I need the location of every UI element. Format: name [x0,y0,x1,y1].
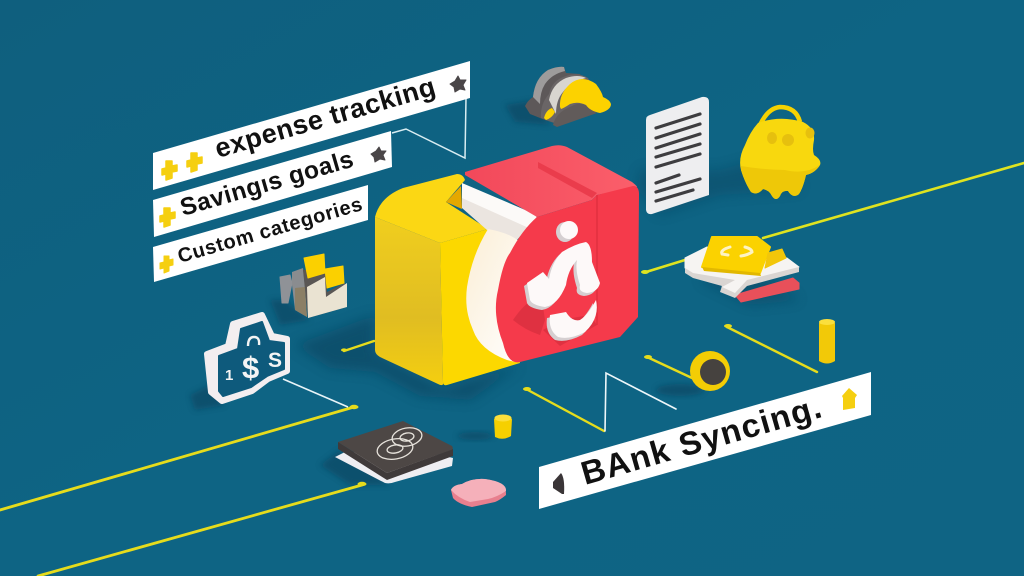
label: savings goals [153,131,392,237]
person symbol [524,221,600,341]
icon: yellow ball [690,351,730,391]
icon: pink blob [451,479,506,507]
small block icon [280,254,347,318]
central cube [375,145,639,385]
icon: yellow house arrow [842,388,857,410]
icon: gray cloud stack [525,67,611,127]
dollar glyphs: $ [242,350,259,385]
icon: yellow cylinder small [494,414,512,439]
icon: stacked cards [685,237,799,302]
text: savings goals: Savingıs goals [177,146,357,222]
red block [465,145,639,362]
dollar glyphs [225,349,282,385]
white paper roll [462,183,537,362]
label: bank syncing [539,372,871,509]
white connector from dollar icon [283,379,348,407]
connector line: top right [641,163,1024,274]
icon: document [646,97,709,214]
text: custom categories: Custom categories [175,193,365,268]
icon: yellow cylinder tall [819,319,835,364]
icon: yellow plus 2 [187,153,202,172]
icon: yellow piggy bank [740,107,820,199]
text: bank syncing: BAnk Syncing. [577,388,825,492]
white connector from labels [392,98,466,158]
icon: yellow plus 1 [162,161,177,180]
connector line: bottom [38,482,366,576]
dollar glyphs: 1 [225,367,233,384]
icon: dark book with rings [335,421,453,483]
dollar glyphs: S [268,349,282,372]
icon: dark arrow [553,473,564,494]
connector line: short by cube [341,341,374,352]
connector to cylinder [724,324,817,372]
icon: yellow plus [160,208,175,227]
text: expense tracking: expense tracking [211,71,439,164]
label: custom categories [153,185,368,282]
yellow block [375,174,520,385]
icon: dark star [450,76,466,92]
connector to ball [644,355,692,378]
zigzag connector [523,373,676,431]
icon: yellow plus [160,256,173,273]
icon: dark star [371,147,386,162]
connector line: lower left long [0,405,358,510]
symbol on card [722,247,752,256]
icon: dollar sign badge [207,315,287,401]
label: expense tracking [153,61,470,190]
